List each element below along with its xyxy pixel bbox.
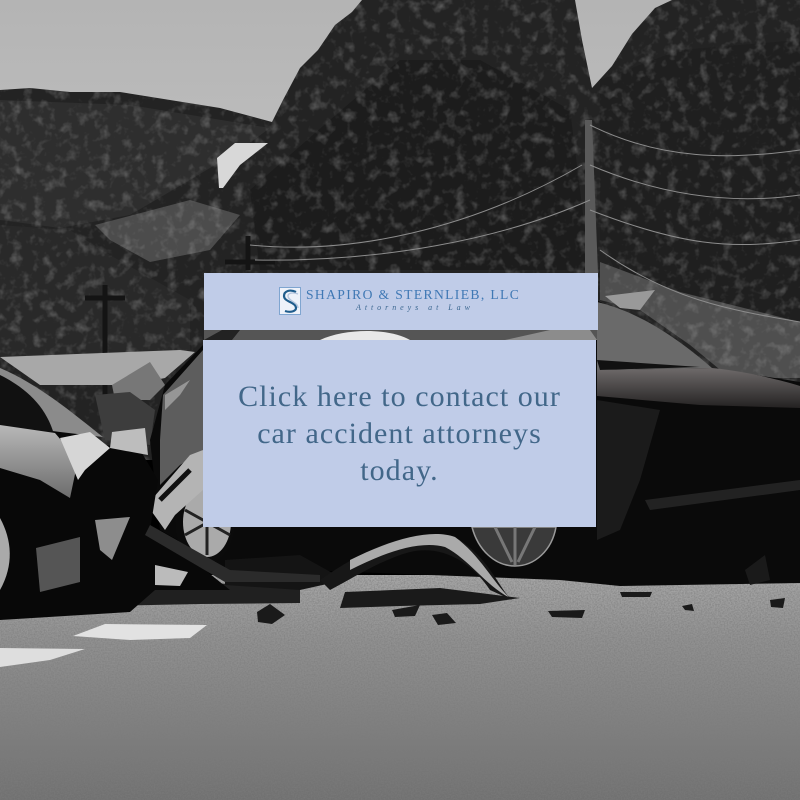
- road debris: [257, 555, 785, 625]
- logo panel: [204, 273, 598, 330]
- glimpse between panels: [204, 330, 598, 340]
- crumpled hood: [60, 432, 110, 480]
- logo icon: S monogram: [279, 287, 301, 315]
- firm name: SHAPIRO & STERNLIEB, LLC: [306, 287, 520, 302]
- silver car on left: [0, 368, 230, 620]
- hood: [597, 368, 800, 408]
- front wheel: [472, 527, 556, 566]
- tagline: Attorneys at Law: [356, 303, 474, 312]
- call to action text: today.: [360, 454, 439, 487]
- crumpled front: [597, 400, 660, 540]
- house on hill: [217, 143, 268, 188]
- call to action text: [238, 380, 561, 487]
- roof and window: [0, 368, 103, 437]
- windshield: [597, 302, 712, 370]
- utility poles and wires: [85, 120, 800, 400]
- bumper arc: [147, 450, 203, 530]
- distant buildings: [0, 350, 195, 385]
- sky: [0, 0, 800, 400]
- left wheel: [0, 518, 10, 590]
- dark car on right: [147, 300, 800, 586]
- call to action text: Click here to contact our: [238, 380, 561, 413]
- call to action panel: [203, 340, 596, 527]
- hills and trees: [0, 0, 800, 460]
- debris highlights: [95, 517, 130, 560]
- crosswalk markings: [73, 624, 207, 640]
- rear wheel: [175, 480, 235, 564]
- broken bumper wreckage: [145, 525, 512, 600]
- grille: [36, 537, 80, 592]
- call to action text: car accident attorneys: [257, 417, 542, 450]
- road edge shadow on left: [0, 580, 300, 612]
- rear side body: [160, 350, 203, 485]
- road: [0, 575, 800, 800]
- fender: [0, 425, 78, 498]
